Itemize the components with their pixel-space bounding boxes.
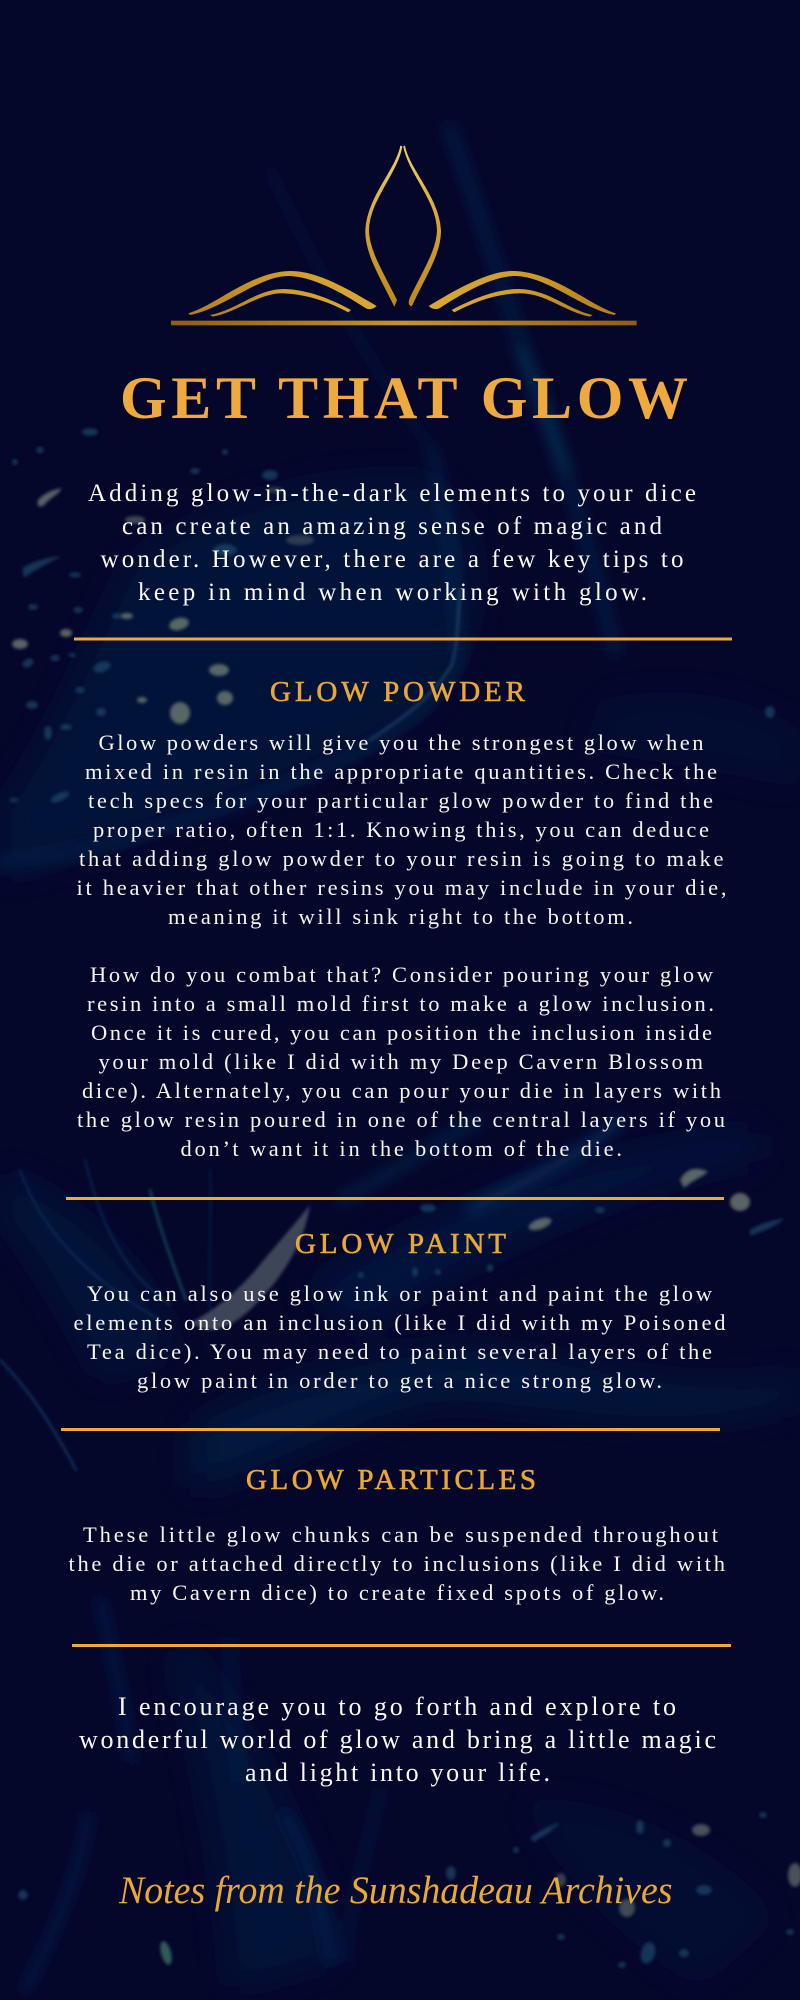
left wing (188, 271, 377, 317)
text block: glow particles: These little glow chunks can be suspended throughout (83, 1522, 719, 1547)
text block: glow powder paragraph one: proper ratio, often 1:1. Knowing this, you can deduce (93, 817, 709, 842)
text block: glow powder paragraph one (76, 730, 726, 929)
text block: glow powder paragraph two: the glow resin poured in one of the central layers if you (77, 1107, 725, 1132)
text block: glow paint: elements onto an inclusion (like I did with my Poisoned (74, 1310, 726, 1335)
heading: glow powder: GLOW POWDER (270, 676, 526, 708)
text block: closing message (79, 1692, 716, 1787)
text block: glow powder paragraph two (77, 962, 725, 1161)
text block: glow particles (68, 1522, 725, 1605)
signature: Notes from the Sunshadeau Archives (118, 1869, 673, 1912)
text block: glow powder paragraph two: resin into a small mold first to make a glow inclusion. (87, 991, 714, 1016)
flame (366, 146, 441, 306)
text block: glow powder paragraph two: dice). Alternately, you can pour your die in layers with (82, 1078, 721, 1103)
logo: golden flame and wings ornament (171, 146, 637, 325)
title: GET THAT GLOW (120, 365, 688, 431)
text block: glow powder paragraph one: that adding glow powder to your resin is going to make (79, 846, 723, 871)
text block: glow particles: the die or attached directly to inclusions (like I did with (68, 1551, 725, 1576)
text block: glow paint: glow paint in order to get a nice strong glow. (137, 1368, 662, 1393)
base bar (171, 321, 637, 325)
text block: glow powder paragraph one: tech specs for your particular glow powder to find the (88, 788, 713, 813)
text block: glow powder paragraph one: meaning it will sink right to the bottom. (168, 904, 633, 929)
text block: glow paint: Tea dice). You may need to paint several layers of the (87, 1339, 712, 1364)
grey brush fleck (192, 1205, 310, 1330)
heading: glow paint: GLOW PAINT (295, 1228, 506, 1260)
text block: glow powder paragraph two: don’t want it in the bottom of the die. (180, 1136, 622, 1161)
text block: glow paint (74, 1281, 726, 1393)
text block: introduction: keep in mind when working with glow. (138, 579, 647, 606)
heading: glow particles: GLOW PARTICLES (246, 1464, 536, 1496)
text block: glow powder paragraph one: it heavier that other resins you may include in your die, (76, 875, 726, 900)
text block: introduction: Adding glow-in-the-dark elements to your dice (88, 480, 696, 507)
text block: introduction (88, 480, 696, 606)
text block: glow powder paragraph one: Glow powders will give you the strongest glow when (98, 730, 703, 755)
text block: glow paint: You can also use glow ink or paint and paint the glow (87, 1281, 713, 1306)
text block: glow powder paragraph two: Once it is cured, you can position the inclusion inside (91, 1020, 712, 1045)
text block: closing message: I encourage you to go forth and explore to (118, 1692, 676, 1721)
text block: closing message: wonderful world of glow and bring a little magic (79, 1725, 716, 1754)
text block: introduction: wonder. However, there are a few key tips to (100, 546, 684, 573)
text block: introduction: can create an amazing sense of magic and (122, 513, 662, 540)
text block: glow powder paragraph two: How do you combat that? Consider pouring your glow (90, 962, 714, 987)
text block: glow particles: my Cavern dice) to create fixed spots of glow. (130, 1580, 664, 1605)
text block: glow powder paragraph one: mixed in resin in the appropriate quantities. Check the (85, 759, 717, 784)
right wing (429, 271, 616, 317)
text block: closing message: and light into your life. (245, 1758, 550, 1787)
text block: glow powder paragraph two: your mold (like I did with my Deep Cavern Blossom (98, 1049, 703, 1074)
